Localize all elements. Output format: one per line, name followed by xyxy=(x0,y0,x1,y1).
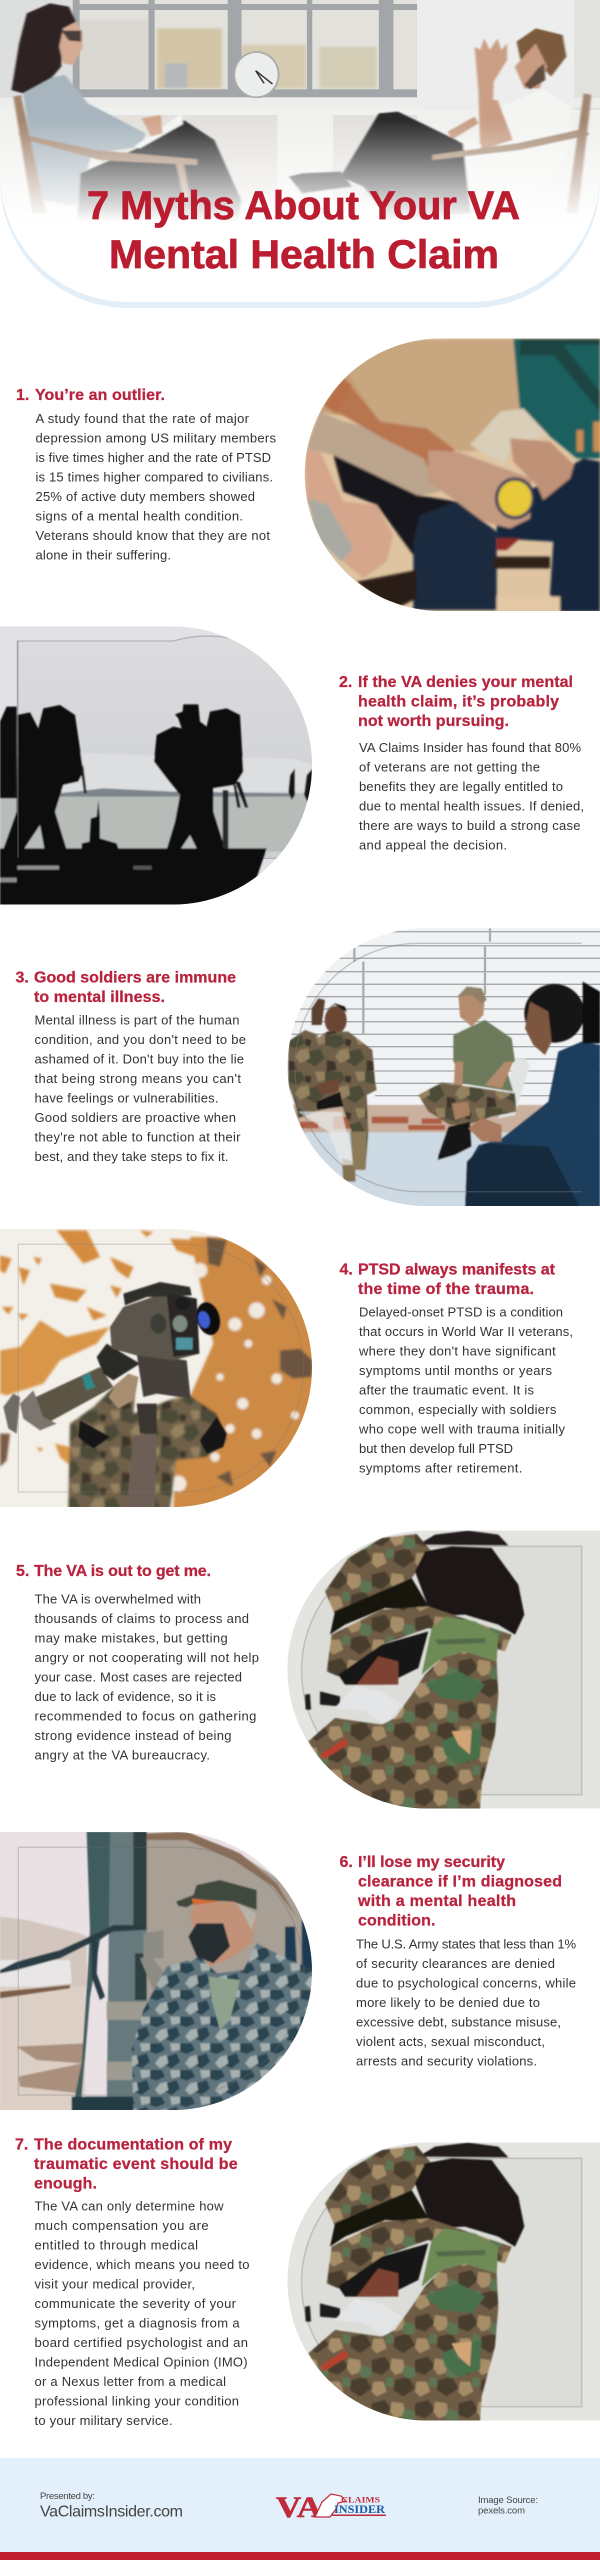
text block: myth 5: angry or not cooperating will not help xyxy=(34,1650,259,1665)
text block: myth 3: condition, and you don't need to be xyxy=(34,1032,246,1047)
photo fade to white xyxy=(0,120,600,222)
text block: myth 4: after the traumatic event. It is xyxy=(359,1382,534,1398)
presented by: Presented by: xyxy=(40,2491,95,2502)
text block: myth 1: is 15 times higher compared to civilians. xyxy=(36,470,273,484)
photo: hands with stress ball xyxy=(300,335,600,615)
panel: myth 6 xyxy=(0,1830,576,2112)
heading: myth 6: clearance if I’m diagnosed xyxy=(358,1874,562,1890)
heading: myth 4 xyxy=(340,1262,556,1298)
heading: myth 4: 4. xyxy=(340,1262,353,1278)
heading: myth 3: Good soldiers are immune xyxy=(34,970,236,986)
text block: myth 7: Independent Medical Opinion (IMO) xyxy=(34,2354,248,2370)
photo: soldier with launcher xyxy=(0,1227,315,1509)
text block: myth 5: strong evidence instead of being xyxy=(34,1728,232,1743)
text block: myth 4: where they don't have significant xyxy=(358,1344,556,1358)
heading: myth 6: 6. xyxy=(340,1854,353,1871)
text block: myth 4: symptoms until months or years xyxy=(359,1363,552,1378)
text block: myth 1: 25% of active duty members showed xyxy=(36,489,255,504)
text block: myth 1: alone in their suffering. xyxy=(36,548,171,562)
text block: myth 7: much compensation you are xyxy=(34,2218,209,2233)
text block: myth 5: due to lack of evidence, so it is xyxy=(34,1689,216,1704)
text block: myth 1 xyxy=(36,411,276,562)
heading: myth 4: PTSD always manifests at xyxy=(358,1262,556,1278)
text block: myth 6: The U.S. Army states that less than 1% xyxy=(356,1936,576,1952)
text block: myth 3: that being strong means you can't xyxy=(34,1071,241,1086)
photo: soldier silhouettes xyxy=(0,625,329,907)
text block: myth 2: of veterans are not getting the xyxy=(359,760,540,774)
text block: myth 4: common, especially with soldiers xyxy=(359,1402,557,1417)
panel: myth 5 xyxy=(16,1528,600,1810)
panel: myth 7 xyxy=(15,2136,600,2428)
text block: myth 4: that occurs in World War II veterans, xyxy=(359,1324,573,1339)
text block: myth 2: there are ways to build a strong case xyxy=(359,818,580,833)
presented by xyxy=(40,2491,183,2520)
panel: myth 4 xyxy=(0,1227,573,1509)
heading: myth 3: 3. xyxy=(16,970,29,986)
text block: myth 5: may make mistakes, but getting xyxy=(34,1630,228,1646)
text block: myth 3: they're not able to function at their xyxy=(34,1130,241,1144)
presented by: VaClaimsInsider.com xyxy=(40,2504,183,2520)
photo: saluting soldier repeat xyxy=(285,2140,600,2422)
text block: myth 2: due to mental health issues. If denied, xyxy=(359,798,584,814)
text block: myth 5 xyxy=(34,1592,259,1762)
text block: myth 1: Veterans should know that they are not xyxy=(36,528,270,543)
heading: myth 6: condition. xyxy=(358,1912,436,1930)
logo: VA Claims Insider: INSIDER xyxy=(334,2502,385,2516)
heading: myth 5: 5. xyxy=(16,1563,29,1580)
title xyxy=(87,184,520,277)
photo: group therapy with soldiers xyxy=(285,925,600,1207)
image source: Image Source: xyxy=(478,2495,538,2506)
photo: masked soldier xyxy=(0,1830,315,2112)
text block: myth 7 xyxy=(34,2198,250,2428)
panel: myth 3 xyxy=(16,925,600,1207)
text block: myth 4 xyxy=(358,1304,573,1476)
title: Mental Health Claim xyxy=(109,233,499,277)
text block: myth 5: recommended to focus on gathering xyxy=(34,1708,256,1724)
heading: myth 2: health claim, it’s probably xyxy=(358,694,559,710)
heading: myth 4: the time of the trauma. xyxy=(358,1281,534,1298)
title: 7 Myths About Your VA xyxy=(87,184,520,228)
heading: myth 7 xyxy=(15,2136,238,2192)
heading: myth 3: to mental illness. xyxy=(34,989,165,1006)
text block: myth 1: depression among US military members xyxy=(36,430,276,446)
text block: myth 2: benefits they are legally entitled to xyxy=(359,779,563,794)
panel: header xyxy=(0,0,600,308)
text block: myth 3 xyxy=(34,1012,246,1164)
heading: myth 2 xyxy=(339,674,573,730)
photo: therapy session xyxy=(0,0,600,218)
text block: myth 1: is five times higher and the rate of PTSD xyxy=(36,450,271,465)
panel: myth 1 xyxy=(16,335,600,615)
heading: myth 5: The VA is out to get me. xyxy=(34,1563,211,1580)
text block: myth 6: more likely to be denied due to xyxy=(356,1995,540,2010)
logo: VA Claims Insider xyxy=(276,2491,386,2524)
header outline xyxy=(0,0,600,308)
text block: myth 3: best, and they take steps to fix it. xyxy=(34,1149,228,1164)
heading: myth 7: The documentation of my xyxy=(34,2136,232,2154)
text block: myth 7: visit your medical provider, xyxy=(34,2276,195,2292)
panel: myth 2 xyxy=(0,625,584,907)
heading: myth 1: 1. xyxy=(16,387,29,404)
image source: pexels.com xyxy=(478,2506,525,2516)
heading: myth 7: enough. xyxy=(34,2176,97,2192)
header panel background xyxy=(0,0,600,302)
text block: myth 1: A study found that the rate of major xyxy=(36,411,250,426)
heading: myth 6: with a mental health xyxy=(357,1893,516,1910)
text block: myth 2 xyxy=(359,740,584,852)
heading: myth 1: You’re an outlier. xyxy=(35,387,165,404)
heading: myth 6: I’ll lose my security xyxy=(358,1854,505,1871)
text block: myth 6: arrests and security violations. xyxy=(356,2054,537,2068)
text block: myth 5: thousands of claims to process and xyxy=(34,1611,249,1626)
text block: myth 4: Delayed-onset PTSD is a condition xyxy=(359,1304,563,1320)
text block: myth 6: due to psychological concerns, while xyxy=(356,1976,576,1990)
heading: myth 7: traumatic event should be xyxy=(34,2156,238,2173)
text block: myth 7: board certified psychologist and an xyxy=(34,2335,248,2350)
text block: myth 7: or a Nexus letter from a medical xyxy=(34,2374,226,2389)
text block: myth 6 xyxy=(356,1936,576,2068)
heading: myth 2: 2. xyxy=(339,674,352,691)
footer background xyxy=(0,2458,600,2552)
text block: myth 2: and appeal the decision. xyxy=(359,838,507,852)
text block: myth 6: violent acts, sexual misconduct, xyxy=(356,2034,545,2049)
text block: myth 6: of security clearances are denied xyxy=(356,1956,555,1971)
logo: VA Claims Insider: CLAIMS xyxy=(341,2496,381,2504)
text block: myth 2: VA Claims Insider has found that 80% xyxy=(359,740,581,755)
panel: footer xyxy=(0,2458,600,2560)
text block: myth 7: entitled to through medical xyxy=(34,2238,198,2252)
text block: myth 4: symptoms after retirement. xyxy=(359,1460,522,1476)
heading: myth 6 xyxy=(340,1854,562,1930)
text block: myth 5: The VA is overwhelmed with xyxy=(34,1592,201,1606)
text block: myth 7: to your military service. xyxy=(34,2413,173,2428)
text block: myth 3: ashamed of it. Don't buy into the lie xyxy=(34,1052,244,1066)
text block: myth 5: angry at the VA bureaucracy. xyxy=(34,1748,210,1762)
text block: myth 7: The VA can only determine how xyxy=(34,2198,224,2214)
text block: myth 3: Mental illness is part of the human xyxy=(34,1012,240,1028)
heading: myth 3 xyxy=(16,970,236,1006)
text block: myth 3: Good soldiers are proactive when xyxy=(34,1110,236,1125)
text block: myth 4: but then develop full PTSD xyxy=(359,1441,513,1456)
heading: myth 2: not worth pursuing. xyxy=(358,713,509,730)
text block: myth 6: excessive debt, substance misuse, xyxy=(356,2014,561,2030)
text block: myth 7: symptoms, get a diagnosis from a xyxy=(34,2316,240,2330)
text block: myth 7: evidence, which means you need to xyxy=(34,2257,250,2272)
text block: myth 5: your case. Most cases are rejected xyxy=(34,1670,242,1684)
text block: myth 1: signs of a mental health condition. xyxy=(36,508,243,524)
footer red bar xyxy=(0,2552,600,2560)
photo: saluting soldier xyxy=(285,1528,600,1810)
text block: myth 3: have feelings or vulnerabilities. xyxy=(34,1090,218,1106)
text block: myth 4: who cope well with trauma initially xyxy=(358,1422,566,1436)
logo: VA Claims Insider: VA xyxy=(276,2491,322,2524)
image source xyxy=(478,2495,538,2516)
heading: myth 7: 7. xyxy=(15,2136,28,2154)
heading: myth 2: If the VA denies your mental xyxy=(358,674,573,691)
text block: myth 7: professional linking your condition xyxy=(34,2394,239,2408)
text block: myth 7: communicate the severity of your xyxy=(34,2296,237,2311)
